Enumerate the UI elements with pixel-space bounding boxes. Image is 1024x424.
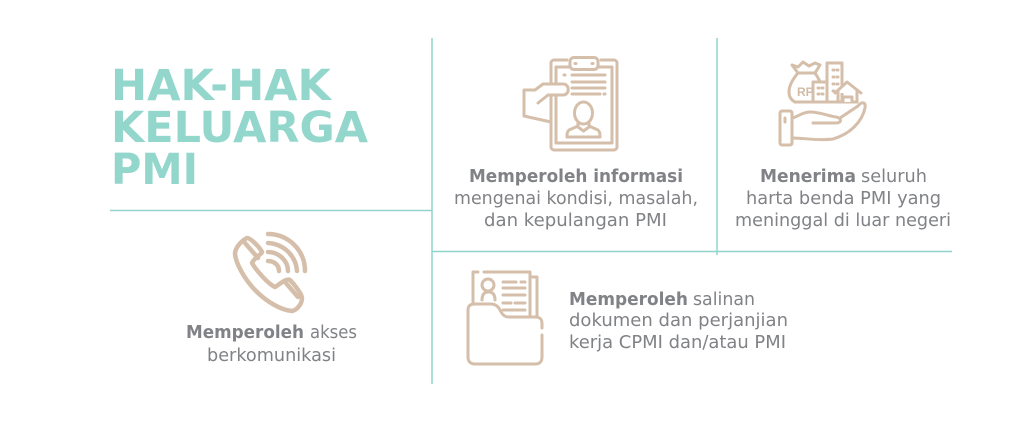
text block: belongings: Menerima (760, 167, 856, 187)
text block: documents: salinan (693, 290, 755, 310)
title: PMI (111, 145, 198, 195)
icon: hand holding money bag and buildings (780, 62, 865, 145)
text block: documents: Memperoleh (569, 290, 688, 310)
text block: communication access (186, 323, 357, 366)
title: KELUARGA (111, 103, 369, 153)
text block: information: dan kepulangan PMI (484, 211, 667, 231)
label: RP text on bag: RP (797, 85, 814, 99)
text block: communication access: Memperoleh (186, 323, 304, 343)
text block: communication access: akses (310, 323, 357, 343)
text block: documents: kerja CPMI dan/atau PMI (569, 333, 786, 353)
icon: telephone with signal waves (235, 234, 305, 311)
text block: communication access: berkomunikasi (207, 346, 336, 366)
text block: belongings: seluruh (861, 167, 927, 187)
text block: information: mengenai kondisi, masalah, (454, 189, 698, 209)
title (111, 61, 369, 195)
text block: belongings (735, 167, 951, 231)
icon: hand holding clipboard with profile (524, 58, 617, 150)
icon: folder with document (468, 272, 542, 364)
text block: information: Memperoleh informasi (469, 167, 683, 187)
text block: documents (569, 290, 788, 353)
title: HAK-HAK (111, 61, 333, 111)
text block: belongings: meninggal di luar negeri (735, 211, 951, 231)
text block: belongings: harta benda PMI yang (746, 189, 941, 209)
text block: documents: dokumen dan perjanjian (569, 311, 788, 331)
text block: information (454, 167, 698, 231)
